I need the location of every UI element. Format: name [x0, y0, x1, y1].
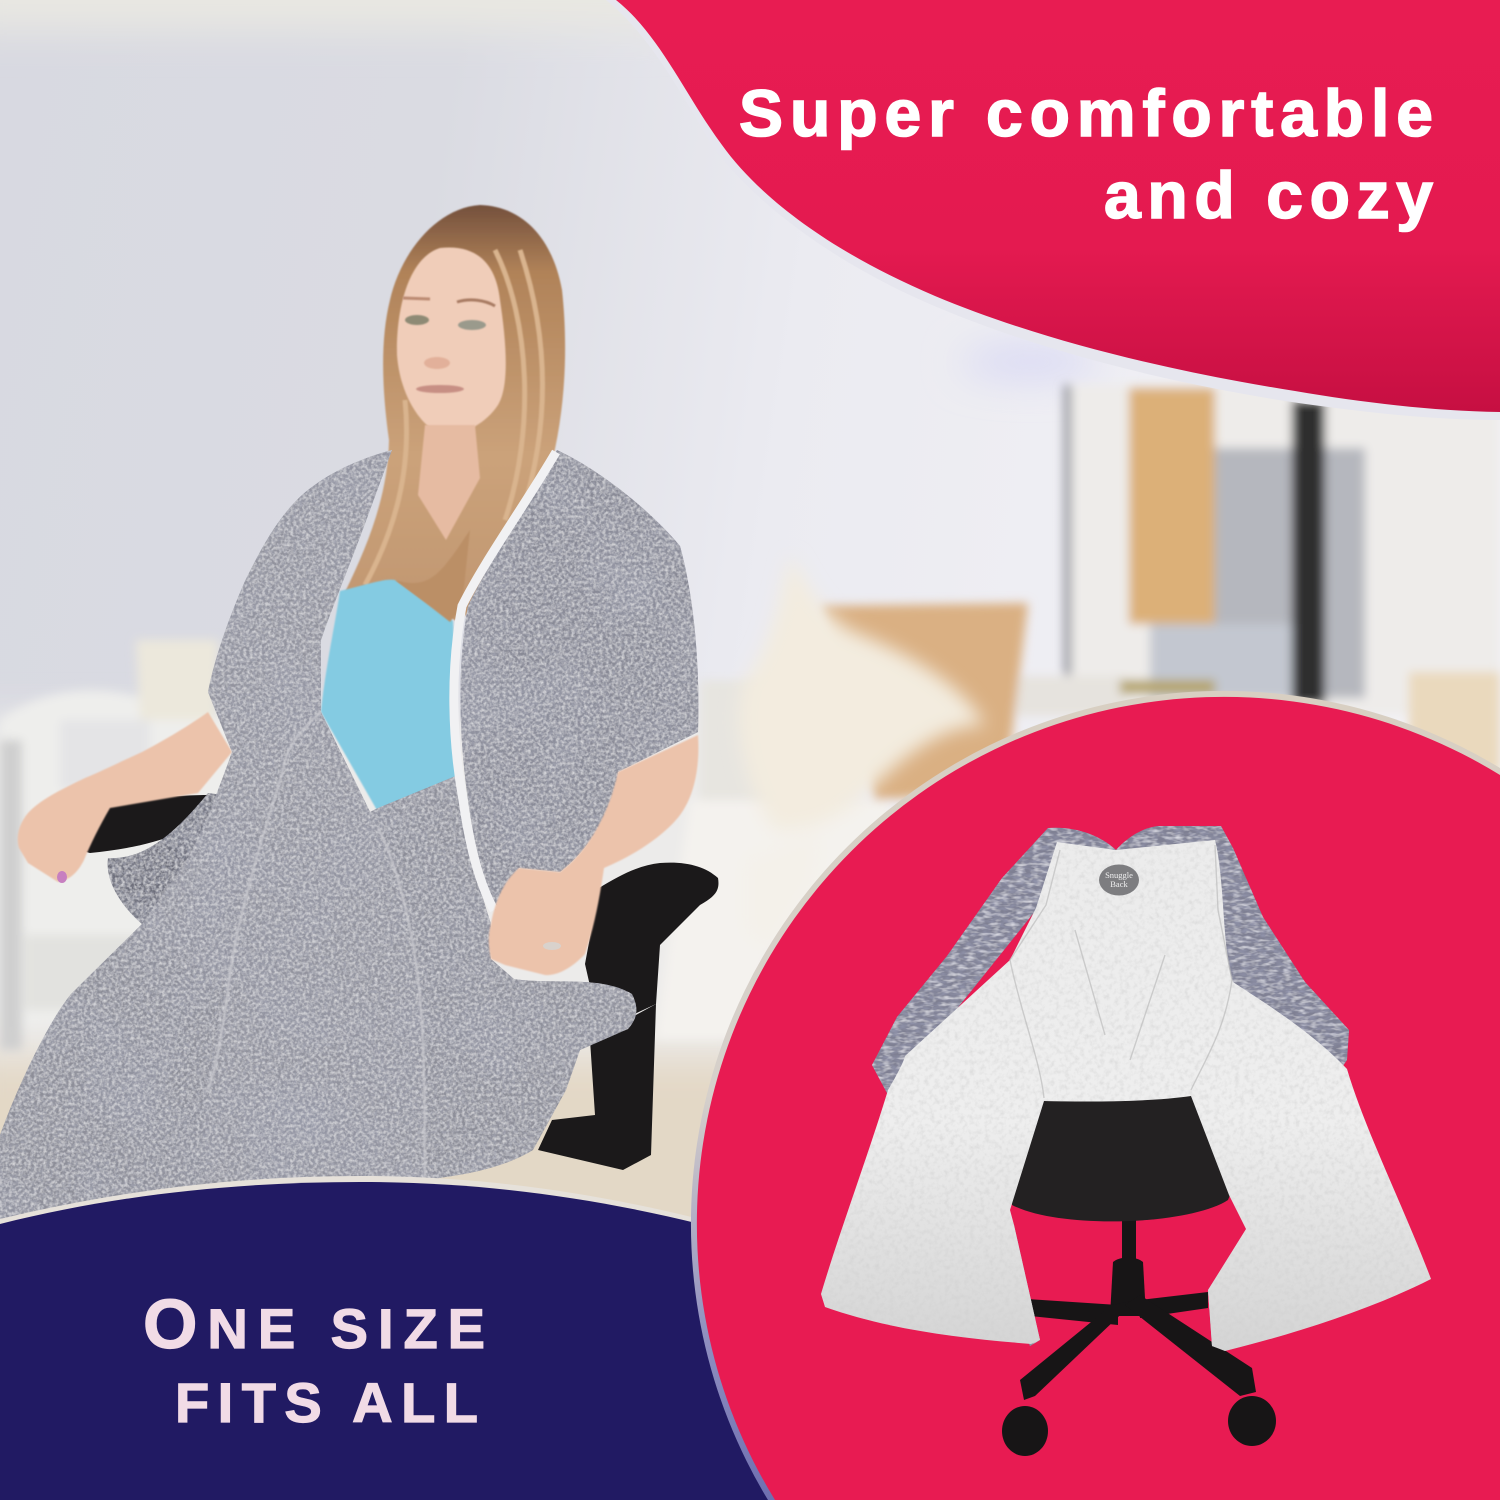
left bare arm: [18, 712, 232, 882]
red circle panel with product: [697, 697, 1500, 1500]
heading: super comfortable and cozy: and cozy: [1104, 158, 1433, 232]
brand label: Snuggle: [1105, 870, 1133, 880]
hair highlights: [365, 250, 542, 585]
brand label: [1099, 864, 1139, 896]
blanket sherpa interior: [821, 840, 1431, 1351]
blanket seams: [208, 712, 425, 1180]
sherpa lining edge: [454, 452, 556, 910]
neck: [418, 425, 480, 540]
right forearm and hand: [489, 735, 698, 975]
text: one size fits all: FITS ALL: [175, 1371, 478, 1434]
text: one size fits all: [143, 1285, 485, 1434]
decorative sofa on the left: [0, 690, 240, 1030]
grey inner blanket folds: [994, 1225, 1250, 1350]
woman in wearable blanket on an office chair: [0, 205, 718, 1225]
hair: [345, 205, 565, 622]
heading: super comfortable and cozy: Super comfortable: [739, 76, 1433, 150]
dark blanket bunch under arm: [108, 793, 260, 924]
lower blanket drape: [0, 775, 636, 1225]
light blue top: [321, 580, 458, 812]
facial features: [403, 298, 495, 393]
face: [397, 247, 506, 434]
decorative pampas plant: [739, 555, 985, 950]
header panel: [616, 0, 1500, 412]
office chair base: [1002, 1215, 1276, 1456]
office chair: [52, 795, 718, 1170]
header panel edge: [606, 0, 1500, 420]
decorative quilt lines: [1010, 845, 1232, 1098]
red circle panel ring: [691, 691, 1500, 1500]
hair lock over top: [395, 530, 470, 622]
blanket: [0, 450, 698, 1225]
right panel: [460, 450, 698, 912]
left front panel: [142, 450, 425, 1180]
brand label: Back: [1110, 879, 1128, 889]
blanket furry collar and sleeves: [872, 826, 1349, 1095]
chair seat: [1012, 1094, 1232, 1221]
ring and nails: [57, 871, 561, 950]
heading: super comfortable and cozy: [739, 76, 1433, 232]
navy panel: [0, 1176, 790, 1500]
text: one size fits all: ONE SIZE: [143, 1285, 485, 1363]
